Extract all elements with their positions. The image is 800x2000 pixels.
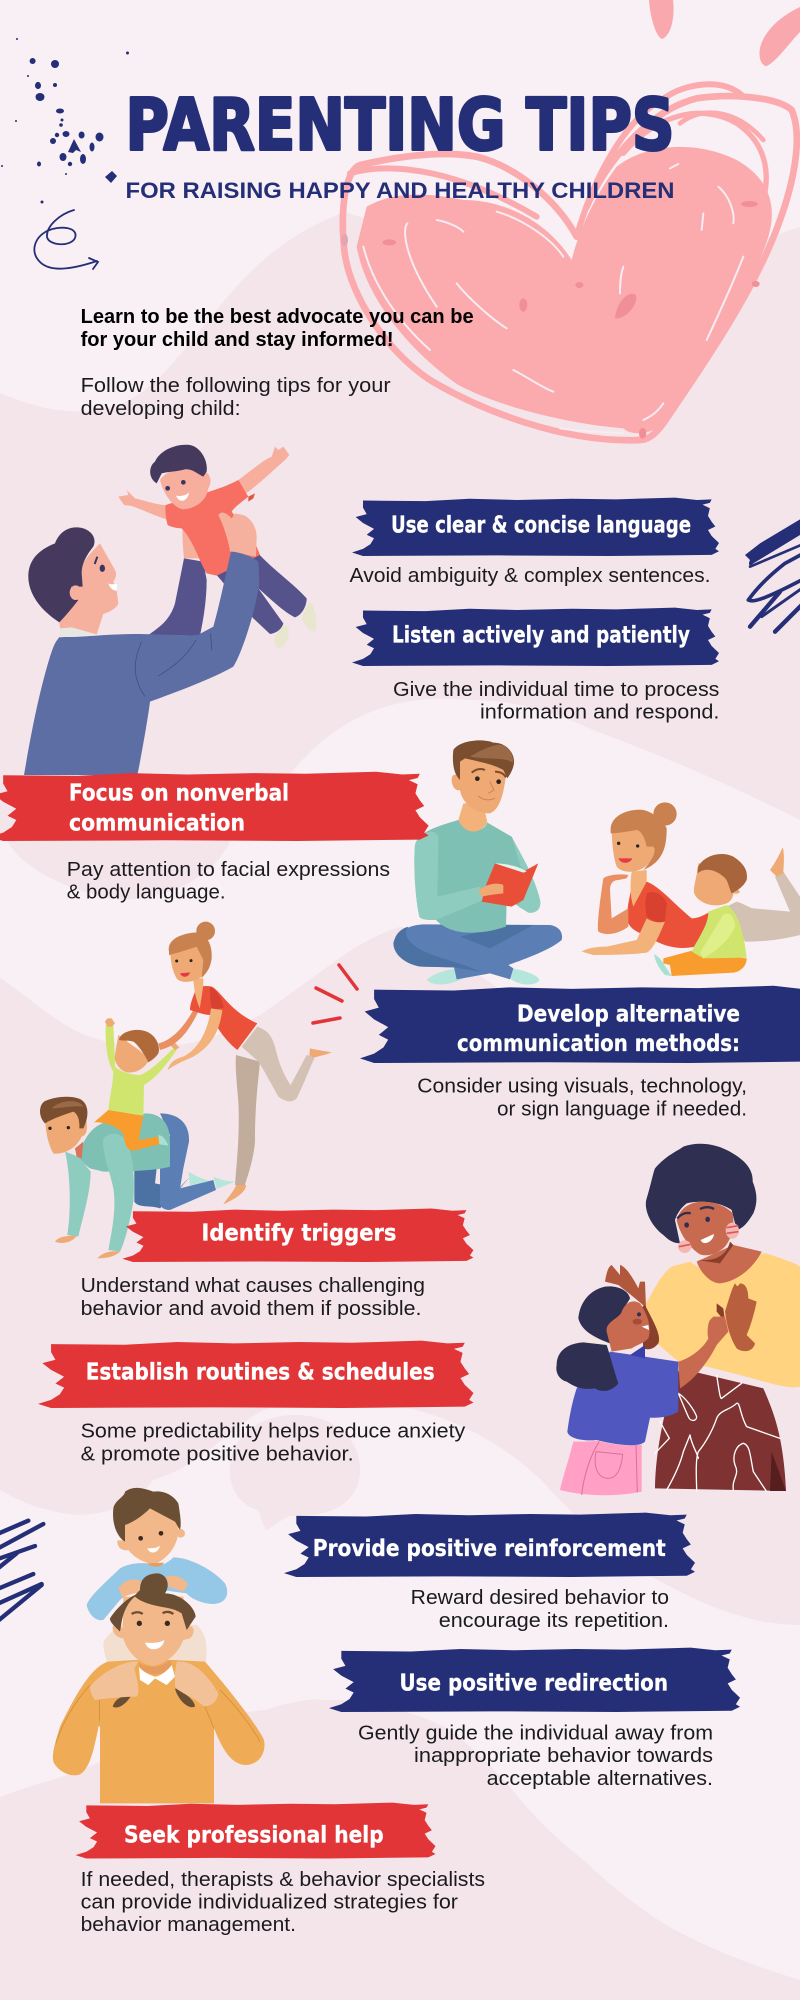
heart scribble — [341, 84, 797, 440]
text: facial expressions — [67, 859, 390, 904]
subtitle: FOR RAISING HAPPY AND HEALTHY CHILDREN — [126, 178, 674, 203]
illustration: family playing — [40, 922, 332, 1258]
text: facial expressions: & body language. — [67, 882, 226, 904]
text: facial expressions: Pay attention to facial expressions — [67, 859, 390, 881]
text: gently guide: Gently guide the individual away from — [358, 1722, 713, 1744]
text: predictability: & promote positive behavior. — [81, 1444, 354, 1466]
intro text: developing child: — [81, 398, 241, 420]
red burst marks — [313, 965, 357, 1023]
text: gently guide — [358, 1722, 713, 1790]
text: consider visuals: or sign language if needed. — [497, 1098, 747, 1120]
text: consider visuals: Consider using visuals, technology, — [417, 1076, 747, 1098]
banner: establish routines: Establish routines & schedules — [86, 1360, 435, 1386]
banner: positive redirection: Use positive redirection — [400, 1671, 668, 1697]
banner: positive redirection — [329, 1648, 740, 1712]
text: understand causes — [81, 1275, 425, 1320]
banner: identify triggers — [122, 1209, 473, 1262]
text: avoid ambiguity: Avoid ambiguity & complex sentences. — [350, 565, 710, 587]
banner: provide reinforcement: Provide positive reinforcement — [313, 1536, 666, 1562]
scribble decoration right — [745, 519, 800, 632]
banner: provide reinforcement — [284, 1513, 695, 1577]
text: predictability: Some predictability helps reduce anxiety — [81, 1421, 465, 1443]
text: understand causes: Understand what causes challenging — [81, 1275, 425, 1297]
text: therapists: can provide individualized strategies for — [81, 1892, 458, 1914]
banner: develop alternative: Develop alternative — [517, 1002, 740, 1028]
intro text — [81, 306, 474, 420]
text: therapists: If needed, therapists & behavior specialists — [81, 1869, 485, 1891]
banner: identify triggers: Identify triggers — [202, 1221, 396, 1247]
text: therapists: behavior management. — [81, 1914, 296, 1936]
title: PARENTING TIPS — [126, 84, 674, 166]
illustration: woman and girl high five — [556, 1144, 800, 1495]
splatter decoration — [1, 38, 129, 204]
text: consider visuals — [417, 1076, 747, 1120]
banner: seek help — [76, 1803, 436, 1858]
scribble decoration left — [0, 1521, 43, 1623]
icon: spiral arrow — [34, 210, 98, 269]
illustration: mother and child lying — [582, 802, 800, 976]
intro text: Learn to be the best advocate you can be — [81, 306, 474, 328]
banner: develop alternative: communication methods: — [457, 1031, 740, 1057]
text: reward: encourage its repetition. — [439, 1610, 669, 1632]
pink drops top right — [649, 0, 800, 66]
banner: use clear language: Use clear & concise language — [391, 513, 691, 539]
banner: use clear language — [352, 498, 719, 556]
text: give time: information and respond. — [480, 702, 719, 724]
banner: develop alternative — [360, 986, 800, 1063]
banner: listen actively: Listen actively and patiently — [392, 623, 690, 649]
banner: focus on nonverbal: communication — [69, 811, 245, 837]
text: gently guide: inappropriate behavior towards — [414, 1745, 713, 1767]
text: predictability — [81, 1421, 465, 1466]
intro text: Follow the following tips for your — [81, 375, 391, 397]
text: give time: Give the individual time to process — [393, 679, 719, 701]
illustration: father with child on shoulders — [53, 1488, 264, 1803]
banner: establish routines — [38, 1341, 474, 1408]
banner: focus on nonverbal — [0, 772, 429, 841]
illustration: man reading book — [393, 740, 562, 985]
text: reward — [411, 1587, 669, 1632]
text: understand causes: behavior and avoid them if possible. — [81, 1298, 421, 1320]
banner: focus on nonverbal: Focus on nonverbal — [69, 781, 289, 807]
text: therapists — [81, 1869, 485, 1936]
text: gently guide: acceptable alternatives. — [487, 1768, 713, 1790]
text: reward: Reward desired behavior to — [411, 1587, 669, 1609]
banner: listen actively — [352, 608, 719, 666]
text: give time — [393, 679, 719, 724]
illustration: father lifting son — [24, 445, 316, 775]
intro text: for your child and stay informed! — [81, 329, 394, 351]
banner: seek help: Seek professional help — [124, 1823, 384, 1849]
